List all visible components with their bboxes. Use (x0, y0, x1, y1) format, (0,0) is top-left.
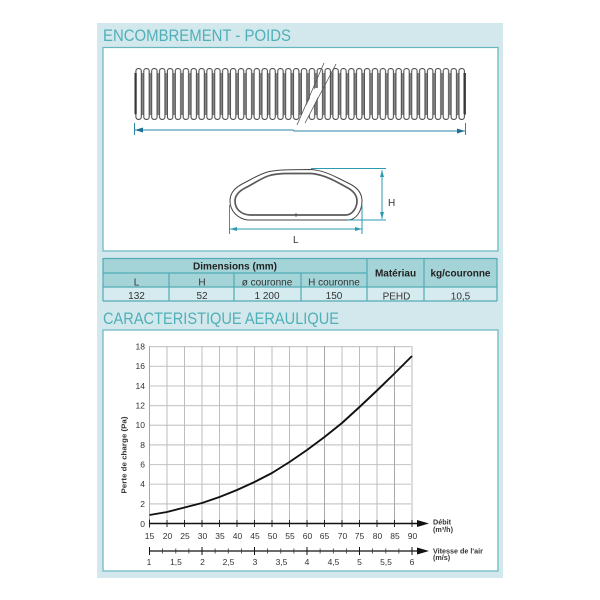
x axis: air velocity: 2,5 (223, 557, 235, 567)
x axis: flow: 70 (338, 531, 347, 541)
y axis labels: 12 (136, 400, 145, 410)
x axis: flow: 15 (145, 531, 154, 541)
dimension: length L: L (293, 235, 299, 246)
dimension: height H (311, 168, 395, 220)
x axis: flow: 25 (180, 531, 190, 541)
dimension: height H: H (388, 198, 395, 209)
x axis: flow: 80 (373, 531, 382, 541)
x axis: air velocity (147, 546, 483, 567)
x axis: air velocity: 3 (253, 557, 258, 567)
table: dimensions: H (198, 278, 206, 288)
x axis: flow: 90 (408, 531, 417, 541)
heading: caracteristique aeraulique: CARACTERISTIQUE AERAULIQUE (103, 310, 339, 328)
panel: aeraulic chart (103, 330, 498, 571)
y axis labels: 0 (140, 519, 145, 529)
x axis: air velocity: Vitesse de l'air (433, 546, 483, 556)
x axis: flow: 20 (163, 531, 172, 541)
y axis labels: 4 (140, 479, 145, 489)
dimension arrow: pipe length (134, 123, 466, 135)
x axis: flow: 85 (390, 531, 400, 541)
x axis: flow: 55 (285, 531, 295, 541)
x axis: flow: 45 (250, 531, 260, 541)
y axis labels: 10 (136, 420, 145, 430)
x axis: air velocity: 6 (410, 557, 415, 567)
y axis labels: 16 (136, 361, 145, 371)
x axis: air velocity: 2 (200, 557, 205, 567)
x axis: air velocity: 4 (305, 557, 310, 567)
x axis: air velocity: 1 (147, 557, 152, 567)
y axis labels: 6 (140, 460, 145, 470)
x axis: air velocity: 4,5 (328, 557, 340, 567)
table: dimensions: ø couronne (242, 278, 293, 288)
table: dimensions: PEHD (383, 292, 410, 302)
x axis: flow: 75 (355, 531, 364, 541)
heading: encombrement: ENCOMBREMENT - POIDS (103, 27, 291, 45)
panel: dimensions drawings (103, 48, 498, 251)
table: dimensions: L (134, 278, 140, 288)
x axis: air velocity: 1,5 (170, 557, 182, 567)
y axis labels: 8 (140, 440, 145, 450)
x axis: air velocity: (m/s) (433, 553, 451, 562)
x axis: flow: 30 (198, 531, 207, 541)
x axis: flow: (m³/h) (433, 525, 454, 534)
y axis labels: 18 (136, 342, 145, 352)
table: dimensions: 10,5 (451, 292, 471, 302)
x axis: flow (145, 518, 454, 541)
table: dimensions: kg/couronne (430, 268, 491, 280)
x axis: air velocity: 5,5 (380, 557, 392, 567)
background sheet (97, 23, 503, 578)
table: dimensions: 52 (196, 291, 208, 302)
y axis labels: 14 (136, 381, 145, 391)
table: dimensions: 150 (326, 291, 343, 302)
table: dimensions: Dimensions (mm) (193, 262, 277, 272)
x axis: flow: Débit (433, 518, 452, 526)
x axis: air velocity: 5 (357, 557, 362, 567)
table: dimensions (103, 258, 497, 302)
table: dimensions: Matériau (375, 268, 416, 280)
y axis labels (136, 342, 145, 529)
table: dimensions: 1 200 (254, 291, 280, 302)
x axis: flow: 65 (320, 531, 329, 541)
x axis: flow: 60 (303, 531, 312, 541)
x axis: flow: 50 (268, 531, 277, 541)
x axis: flow: 40 (233, 531, 242, 541)
drawing: oval pipe cross-section (230, 170, 362, 220)
drawing: corrugated pipe side view (135, 63, 466, 125)
y axis labels: 2 (140, 499, 145, 509)
line chart: pressure loss vs flow (120, 342, 483, 567)
y axis title: Perte de charge (Pa) (120, 416, 128, 494)
table: dimensions: H couronne (308, 278, 360, 288)
x axis: flow: 35 (215, 531, 225, 541)
dimension: length L (230, 205, 362, 246)
curve (150, 356, 412, 515)
x axis: air velocity: 3,5 (276, 557, 288, 567)
table: dimensions: 132 (128, 291, 145, 302)
